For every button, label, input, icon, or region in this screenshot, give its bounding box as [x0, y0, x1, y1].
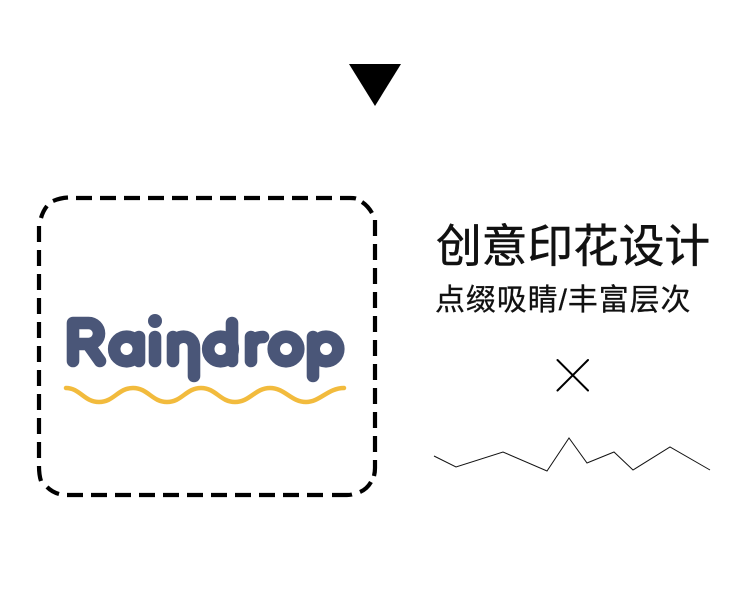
letter n with descender — [173, 337, 194, 376]
letter i stem — [149, 337, 161, 361]
icon: downward triangle — [349, 64, 401, 106]
letter i dot — [148, 314, 162, 328]
letter a — [114, 337, 139, 361]
letter d — [208, 323, 233, 361]
wavy underline — [66, 388, 344, 402]
subheading: 点缀吸睛/丰富层次 — [435, 284, 691, 317]
letter o — [274, 337, 298, 361]
heading: 创意印花设计 — [436, 221, 710, 272]
letter p — [313, 337, 338, 376]
letter r — [251, 337, 263, 361]
icon: cross mark — [558, 360, 588, 390]
letter R — [73, 323, 100, 361]
panel: dashed rounded frame — [39, 198, 375, 495]
zigzag line — [434, 438, 710, 471]
logo: Raindrop wordmark — [73, 314, 338, 376]
